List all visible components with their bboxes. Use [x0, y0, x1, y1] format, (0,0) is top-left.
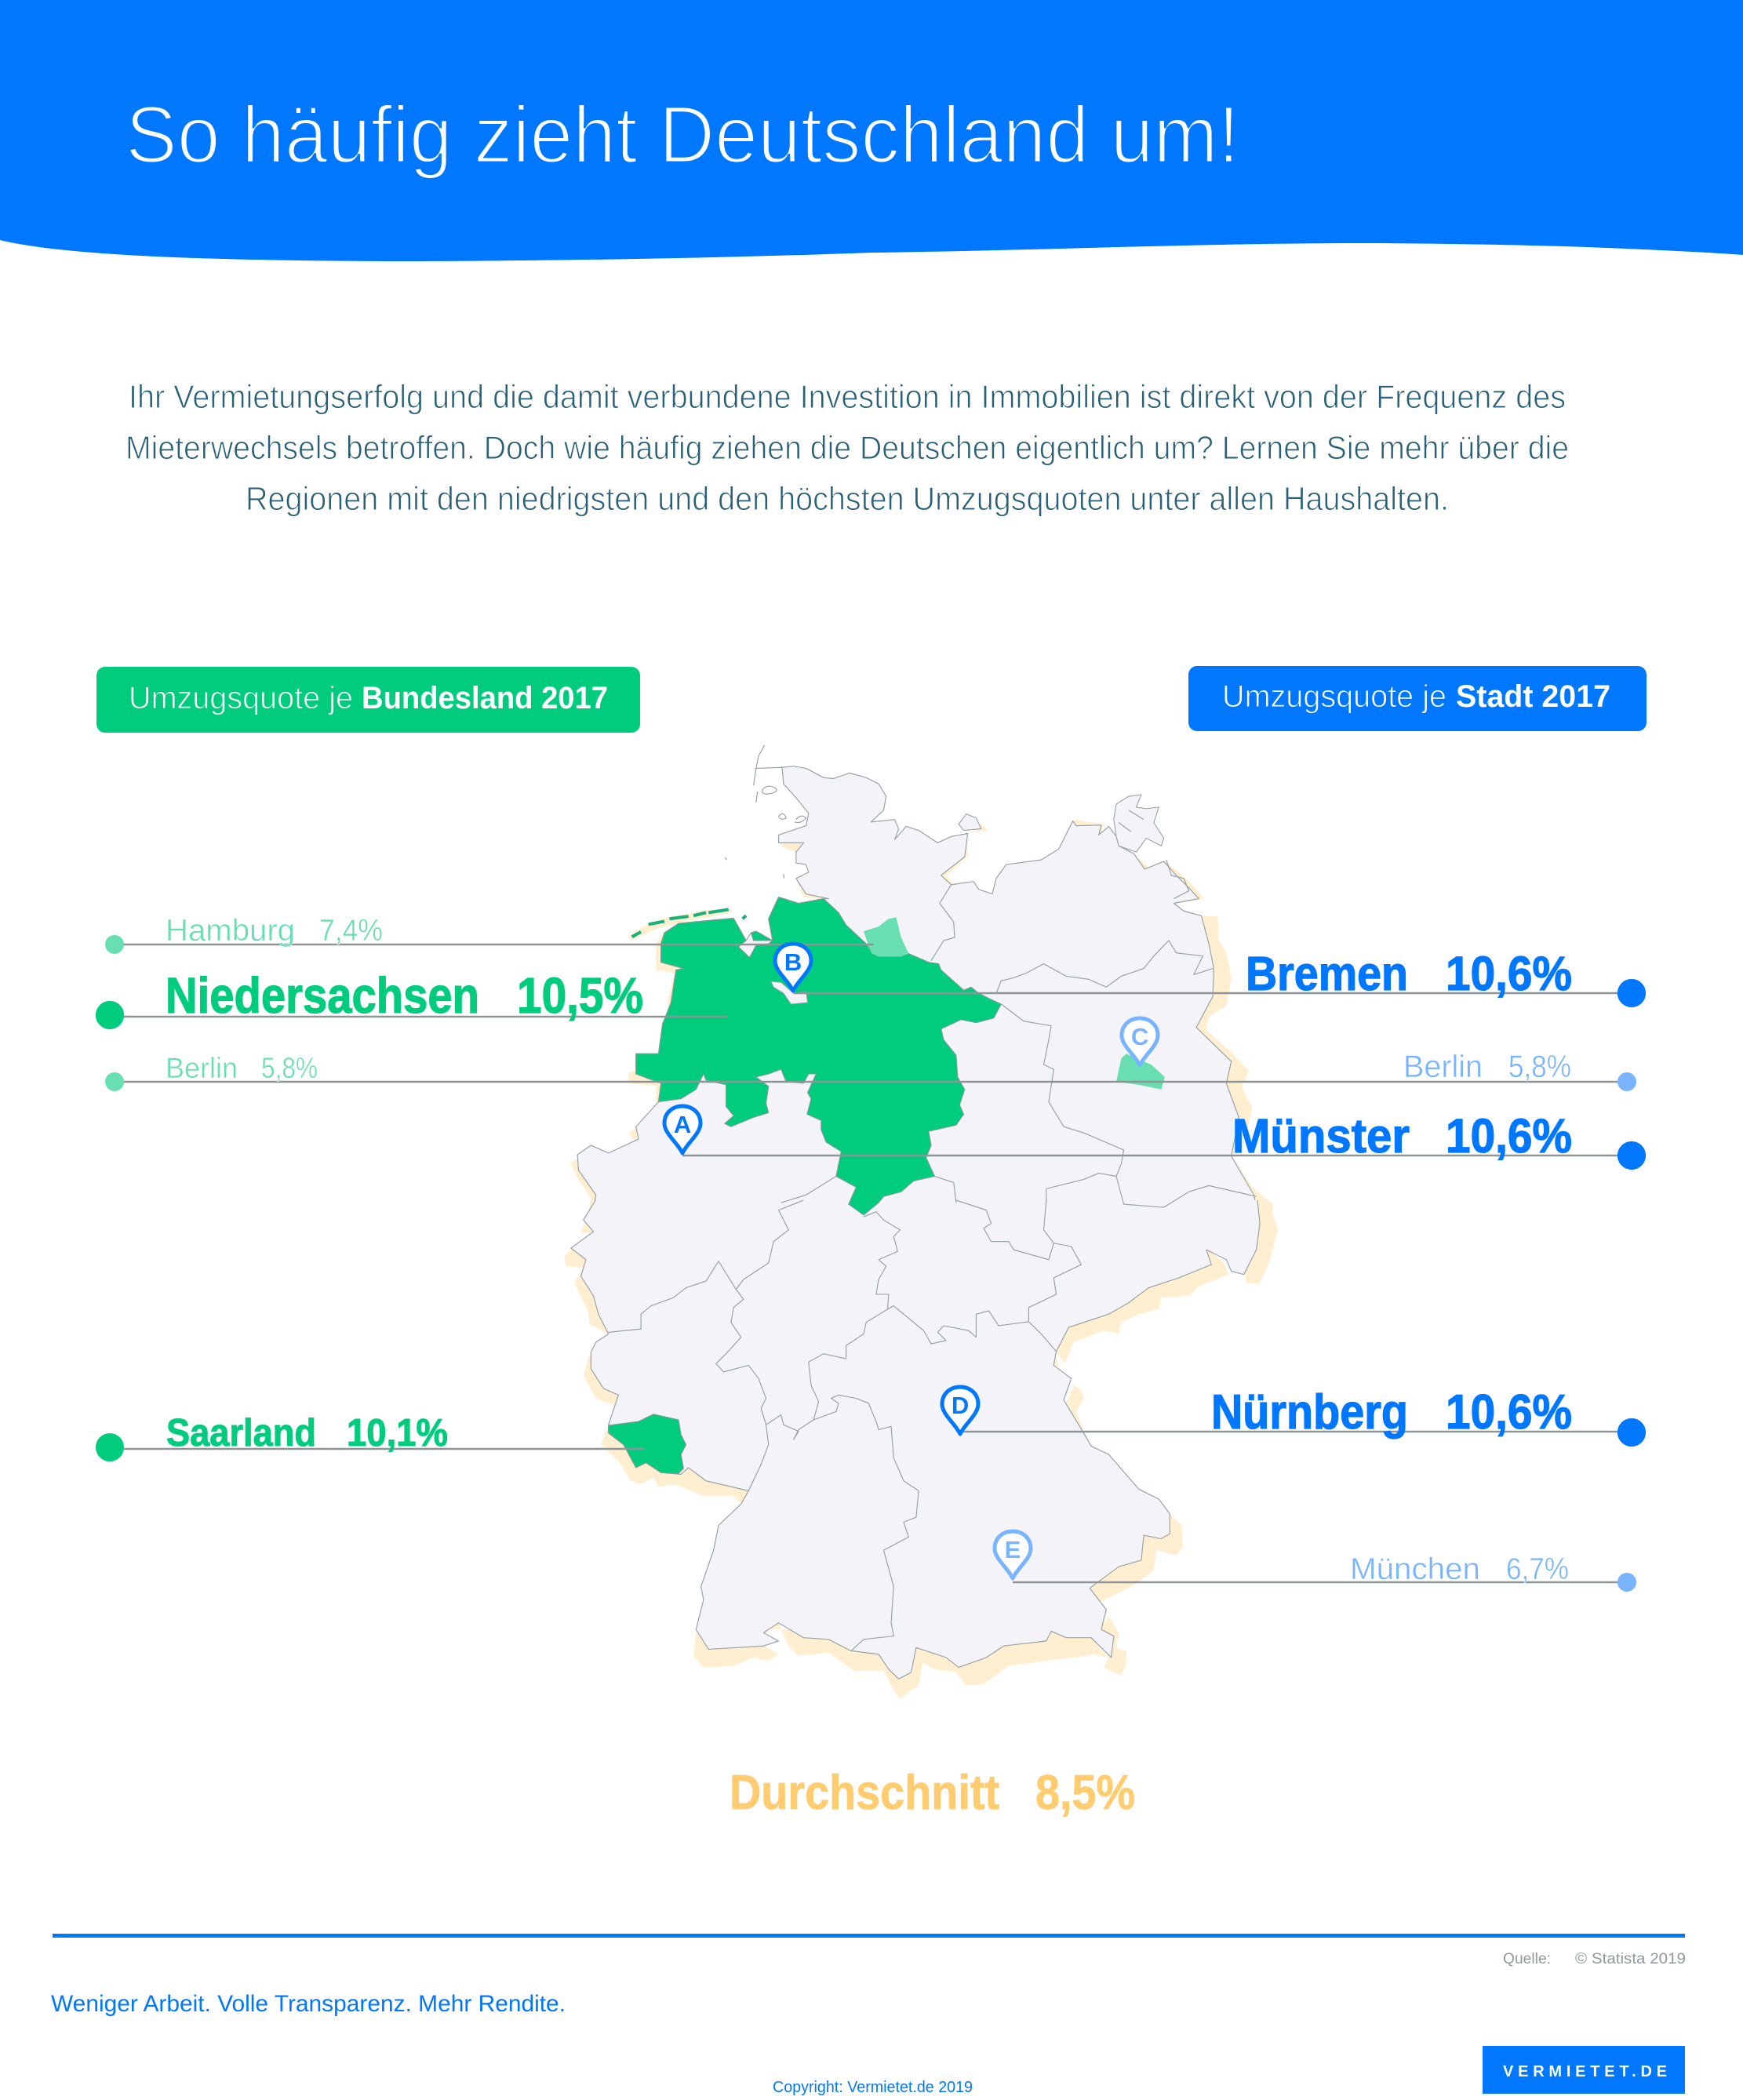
label: Durchschnitt 8,5%: Durchschnitt	[730, 1766, 999, 1820]
copyright: Copyright: Vermietet.de 2019	[773, 2079, 973, 2096]
intro paragraph: Ihr Vermietungserfolg und die damit verbundene Investition in Immobilien ist direkt von der Frequenz des	[129, 378, 1566, 415]
label: Niedersachsen 10,5%: 10,5%	[517, 967, 643, 1024]
footer rule	[53, 1934, 1685, 1938]
intro paragraph	[126, 378, 1569, 517]
label: Bremen 10,6%: Bremen	[1246, 947, 1408, 1000]
intro paragraph: Regionen mit den niedrigsten und den höchsten Umzugsquoten unter allen Haushalten.	[246, 480, 1449, 517]
intro paragraph: Mieterwechsels betroffen. Doch wie häufig ziehen die Deutschen eigentlich um? Lernen Sie mehr über die	[126, 429, 1569, 466]
pin E	[995, 1531, 1031, 1578]
source note: © Statista 2019	[1575, 1951, 1686, 1967]
pin B	[775, 944, 811, 991]
logo box	[1483, 2046, 1685, 2094]
label: Hamburg 7,4%: 7,4%	[319, 914, 383, 948]
region: Berlin	[1116, 1054, 1165, 1090]
label: Münster 10,6%: Münster	[1232, 1109, 1410, 1163]
slogan: Weniger Arbeit. Volle Transparenz. Mehr Rendite.	[51, 1991, 566, 2017]
pin A	[664, 1106, 700, 1153]
region: Saarland	[609, 1414, 686, 1474]
region: Bremen hole	[771, 981, 808, 1004]
label: München 6,7%: München	[1350, 1552, 1480, 1586]
label: Hamburg 7,4%	[105, 914, 383, 954]
label: Durchschnitt 8,5%: 8,5%	[1035, 1766, 1135, 1820]
label: Münster 10,6%	[1232, 1109, 1646, 1169]
label: Niedersachsen 10,5%: Niedersachsen	[166, 967, 479, 1024]
pin A: A	[674, 1111, 691, 1138]
label: Hamburg 7,4%: Hamburg	[166, 914, 295, 948]
pin D	[942, 1387, 978, 1434]
label: Münster 10,6%: 10,6%	[1446, 1109, 1572, 1163]
label: München 6,7%	[1350, 1552, 1636, 1592]
label: Berlin 5,8% left: Berlin	[166, 1052, 238, 1084]
region: Niedersachsen	[636, 897, 1001, 1215]
island: Usedom	[1119, 810, 1189, 899]
label: Berlin 5,8% right: Berlin	[1403, 1050, 1483, 1084]
label: Bremen 10,6%	[1246, 947, 1646, 1007]
leader lines	[110, 944, 1632, 1582]
pin B: B	[784, 948, 802, 976]
label: Saarland 10,1%	[96, 1412, 448, 1461]
button: Umzugsquote je Stadt 2017: Umzugsquote je	[1222, 679, 1446, 714]
island: Fehmarn	[959, 814, 981, 831]
label: Saarland 10,1%: Saarland	[166, 1412, 316, 1454]
label: Berlin 5,8% left	[105, 1052, 318, 1091]
map shadow bottom half	[565, 1200, 1278, 1699]
land area bottom half	[571, 1181, 1260, 1679]
state borders south	[609, 1200, 1081, 1651]
land area top half	[577, 745, 1257, 1214]
title: So häufig zieht Deutschland um!	[126, 89, 1239, 180]
label: Nürnberg 10,6%: Nürnberg	[1211, 1385, 1408, 1439]
button: Umzugsquote je Bundesland 2017: Bundesland 2017	[362, 681, 608, 715]
state borders north	[781, 885, 1257, 1207]
pin C	[1122, 1018, 1158, 1065]
map shadow top half	[570, 813, 1273, 1214]
map of Germany	[565, 745, 1278, 1699]
button: Umzugsquote je Bundesland 2017: Umzugsquote je	[129, 681, 353, 715]
pin C: C	[1131, 1023, 1148, 1050]
label: Niedersachsen 10,5%	[96, 967, 643, 1029]
source note	[1503, 1951, 1686, 1967]
North Sea islands	[725, 745, 806, 879]
label: Berlin 5,8% right: 5,8%	[1508, 1050, 1571, 1084]
regions north	[632, 897, 1165, 1215]
logo box: VERMIETET.DE	[1503, 2063, 1667, 2080]
label: Berlin 5,8% left: 5,8%	[261, 1052, 318, 1084]
pin D: D	[952, 1392, 969, 1419]
label: Berlin 5,8% right	[1403, 1050, 1636, 1091]
label: Bremen 10,6%: 10,6%	[1446, 947, 1572, 1000]
label: Nürnberg 10,6%: 10,6%	[1446, 1385, 1572, 1439]
label: Saarland 10,1%: 10,1%	[347, 1412, 448, 1454]
pin E: E	[1005, 1536, 1021, 1563]
button: Umzugsquote je Stadt 2017: Stadt 2017	[1456, 679, 1610, 714]
label: Nürnberg 10,6%	[1211, 1385, 1646, 1447]
Frisian islands	[632, 909, 746, 937]
header banner with wave	[0, 0, 1743, 261]
button: Umzugsquote je Stadt 2017	[1188, 666, 1647, 731]
region: Hamburg	[864, 917, 908, 957]
label: München 6,7%: 6,7%	[1506, 1552, 1569, 1586]
button: Umzugsquote je Bundesland 2017	[96, 667, 640, 733]
source note: Quelle:	[1503, 1951, 1551, 1967]
island: Rügen	[1114, 795, 1164, 852]
